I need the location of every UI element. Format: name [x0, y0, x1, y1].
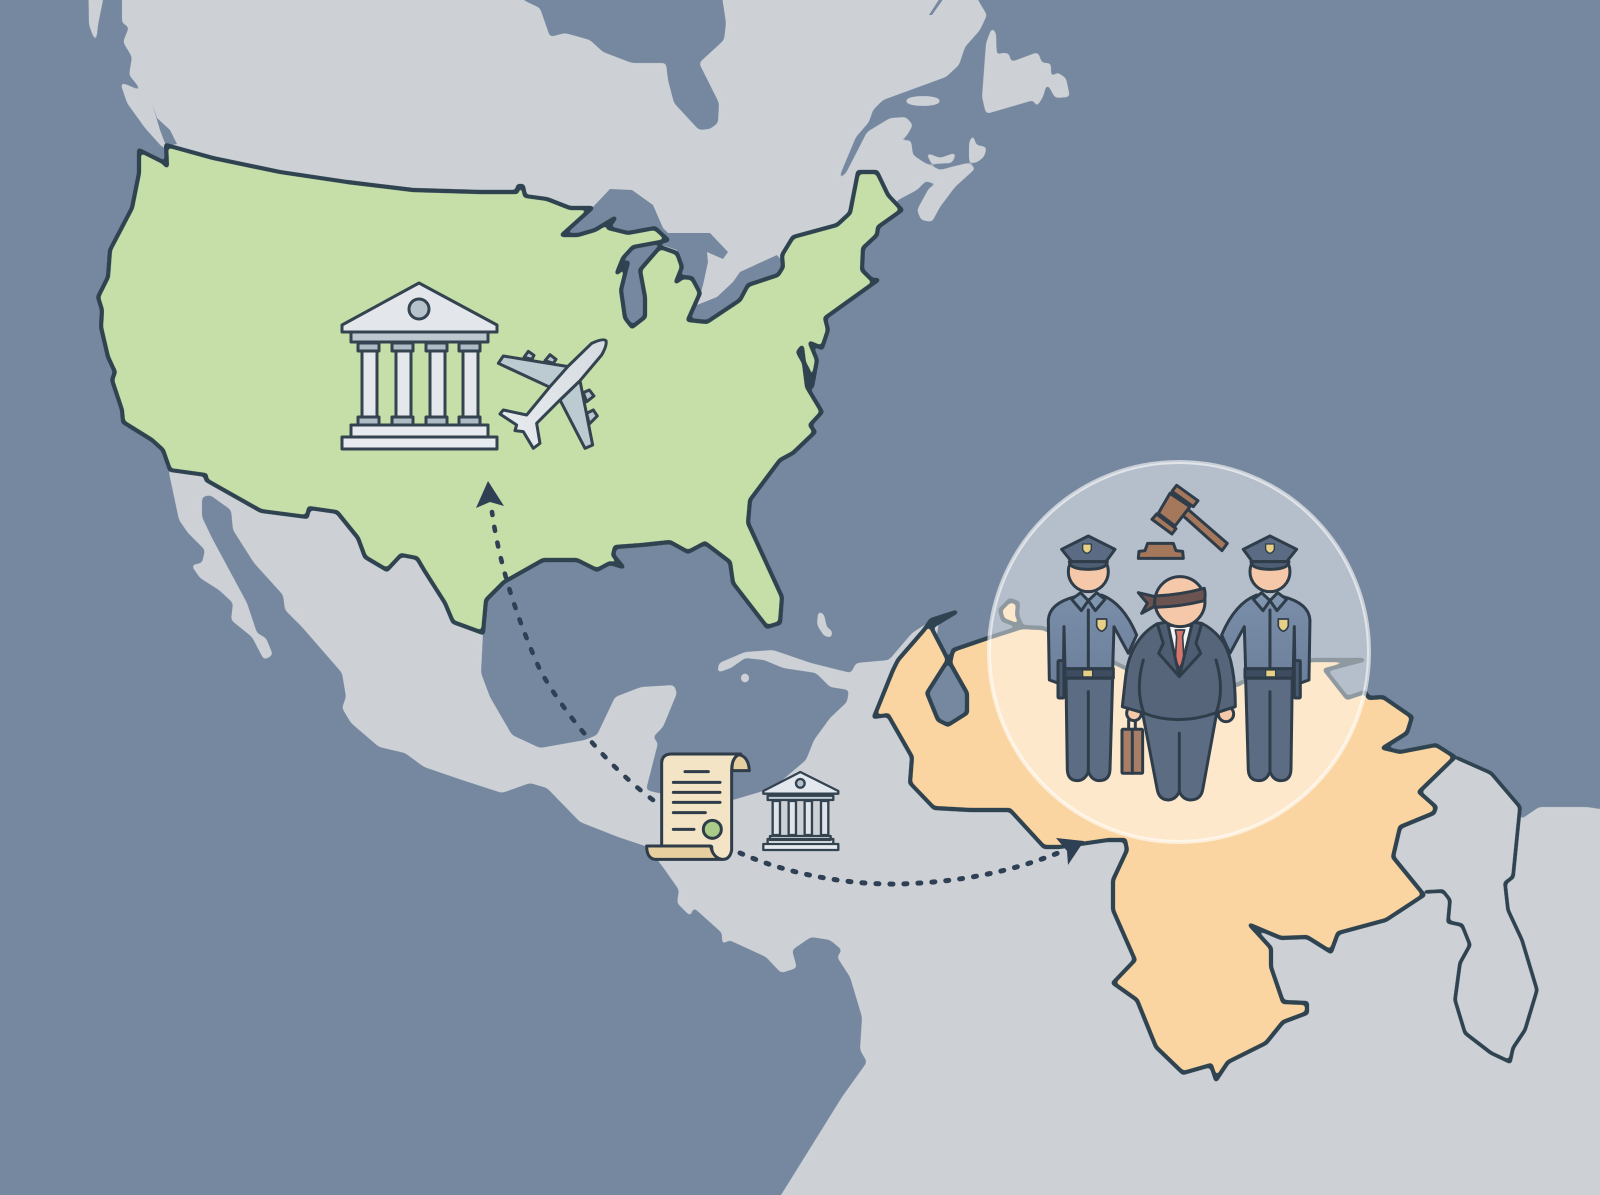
left police officer	[1048, 536, 1137, 781]
capitals and bases	[358, 343, 480, 425]
shirt placket	[1084, 610, 1093, 668]
strait: Vancouver	[152, 103, 177, 146]
Lake Maracaibo	[927, 640, 967, 725]
country: United States	[98, 145, 902, 633]
United States border	[98, 145, 902, 633]
chest badge	[1097, 619, 1107, 631]
trousers	[1066, 678, 1113, 781]
icon: large government building	[342, 283, 497, 449]
cap crown	[1062, 536, 1115, 562]
trousers	[1143, 713, 1217, 800]
trouser crease	[1175, 733, 1184, 792]
gavel caps	[1152, 485, 1198, 534]
right police officer	[1222, 536, 1310, 781]
cap badge	[1083, 544, 1091, 553]
suit jacket	[1122, 620, 1235, 720]
dashed route: to Venezuela	[740, 838, 1084, 884]
icon: small government building	[763, 772, 838, 850]
shirt placket	[1265, 610, 1274, 668]
United States fill	[98, 145, 902, 633]
island: Newfoundland	[982, 27, 1070, 114]
text lines	[673, 772, 720, 829]
left hand	[1127, 706, 1141, 721]
arrowhead	[476, 481, 504, 508]
icon: gavel	[1138, 485, 1227, 558]
paper	[662, 754, 741, 859]
shirt	[1166, 626, 1194, 673]
island: Jamaica	[740, 673, 750, 683]
collar	[1253, 593, 1287, 611]
seal	[703, 820, 721, 838]
head	[1068, 552, 1108, 592]
belt	[1065, 669, 1113, 678]
illustration: arrested man with police	[1048, 485, 1310, 800]
medallion	[796, 779, 805, 788]
pediment medallion	[409, 299, 429, 319]
blindfold knot	[1138, 593, 1155, 613]
briefcase	[1122, 729, 1143, 773]
lapels	[1157, 622, 1202, 677]
Venezuela fill	[874, 600, 1455, 1080]
entablature	[351, 332, 488, 342]
far wing	[498, 356, 568, 387]
trousers	[1246, 678, 1292, 781]
island: Haida Gwaii	[88, 0, 106, 44]
lower step	[342, 437, 497, 449]
bottom curl	[647, 846, 722, 859]
steps	[763, 836, 838, 850]
columns	[362, 351, 478, 417]
head	[1250, 552, 1290, 592]
magnifier circle	[989, 462, 1369, 842]
head	[1155, 577, 1205, 627]
briefcase seam	[1128, 729, 1137, 773]
blindfolded man in suit	[1122, 577, 1235, 800]
route line	[492, 512, 653, 800]
trouser crease	[1084, 692, 1093, 772]
arrowhead	[1056, 838, 1084, 865]
holster	[1294, 661, 1300, 698]
collar	[1072, 593, 1105, 611]
cap peak	[1251, 562, 1289, 569]
engines	[524, 351, 597, 424]
right hand	[1218, 706, 1234, 722]
blindfold	[1155, 588, 1205, 607]
route line	[740, 853, 1058, 884]
entablature	[768, 796, 833, 800]
briefcase handle	[1129, 718, 1135, 729]
holster	[1058, 661, 1064, 698]
island: Bahamas	[817, 611, 832, 638]
sound block	[1138, 543, 1183, 558]
tie	[1175, 630, 1185, 668]
inlet: St Lawrence sliver	[929, 0, 944, 15]
columns	[773, 801, 828, 835]
trouser crease	[1265, 692, 1274, 772]
Venezuela border	[874, 600, 1455, 1080]
buckle	[1266, 670, 1276, 677]
arm and torso	[1222, 595, 1310, 683]
Great Lakes	[562, 189, 785, 328]
arm and torso	[1048, 595, 1137, 683]
cap badge	[1266, 544, 1274, 553]
country: Venezuela	[874, 600, 1455, 1080]
island: Cape Breton	[969, 133, 987, 163]
pediment	[342, 283, 497, 332]
buckle	[1083, 670, 1093, 677]
upper step	[351, 425, 488, 437]
gavel handle	[1183, 509, 1227, 551]
top curl	[732, 754, 749, 771]
gavel head	[1158, 493, 1190, 526]
jacket belly curves	[1139, 660, 1220, 713]
fuselage and tail	[500, 340, 606, 448]
belt	[1245, 669, 1293, 678]
cap crown	[1243, 536, 1297, 562]
chest badge	[1278, 619, 1288, 631]
icon: treaty scroll	[647, 754, 749, 859]
pediment	[763, 772, 838, 794]
near wing	[560, 381, 593, 448]
outline: Guyana	[1424, 757, 1537, 1062]
island: Prince Edward	[925, 152, 957, 164]
dashed route: to United States	[476, 481, 653, 800]
icon: airplane	[498, 340, 606, 448]
cap peak	[1069, 562, 1107, 569]
island: Anticosti	[905, 96, 941, 106]
